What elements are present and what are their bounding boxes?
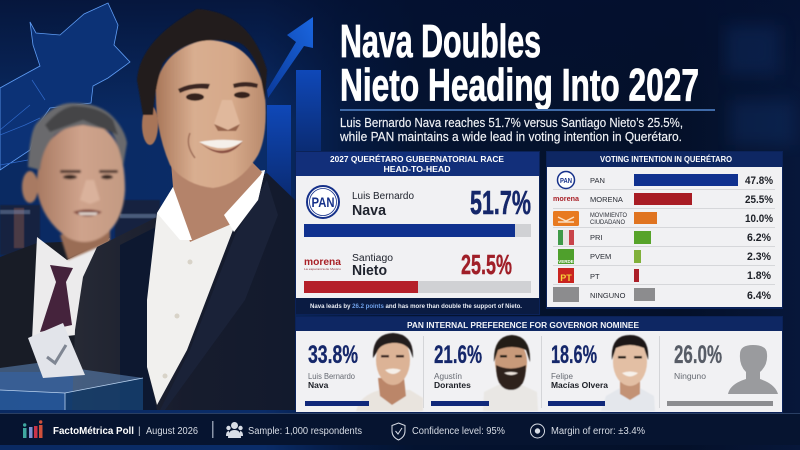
- pollster and date: August 2026: [146, 426, 198, 437]
- panel heading: VOTING INTENTION IN QUERÉTARO: [600, 155, 732, 164]
- title: Nava Doubles: [340, 15, 541, 67]
- pollster and date: [53, 425, 198, 437]
- row: PVEM: PVEM: [590, 252, 611, 261]
- pollster and date: FactoMétrica Poll: [53, 425, 134, 437]
- panel heading: 2027 QUERÉTARO GUBERNATORIAL RACE: [330, 155, 505, 164]
- morena logo: morena: [304, 256, 341, 268]
- candidate: Nava: [305, 333, 423, 411]
- row dividers: [553, 190, 775, 284]
- row: PAN: 47.8%: [745, 175, 773, 187]
- title: [340, 15, 699, 110]
- row: MORENA: MORENA: [590, 195, 623, 204]
- subtitle: Luis Bernardo Nava reaches 51.7% versus Santiago Nieto’s 25.5%,: [340, 116, 683, 130]
- option: Ninguno: Ninguno: [674, 372, 707, 381]
- map of Querétaro: [0, 3, 130, 170]
- icon: target: [530, 424, 544, 438]
- panel: PAN internal preference: [295, 316, 783, 413]
- sample: Sample: 1,000 respondents: [248, 426, 362, 437]
- row: PT: PT: [560, 273, 572, 283]
- panel: head-to-head: [295, 151, 540, 315]
- row: PAN: PAN: [590, 176, 605, 185]
- candidate: Dorantes: 21.6%: [434, 341, 482, 369]
- candidate: Dorantes: Agustín: [434, 372, 462, 381]
- row: NINGUNO: 6.4%: [747, 290, 771, 302]
- candidate: Macías Olvera: 18.6%: [551, 341, 597, 369]
- photo: Macías Olvera: [601, 335, 655, 411]
- row: PT: PT: [590, 272, 600, 281]
- title rule: [340, 109, 715, 111]
- silhouette: [728, 345, 778, 394]
- photo: Nava: [356, 333, 423, 411]
- confidence: Confidence level: 95%: [412, 426, 505, 437]
- candidate: Macías Olvera: Macías Olvera: [551, 380, 608, 390]
- ballot paper with check: [28, 323, 85, 378]
- lead note: Nava leads by 26.2 points and has more than double the support of Nieto.: [310, 303, 522, 310]
- rising bars and arrow: [267, 17, 321, 200]
- PAN logo: [307, 186, 339, 218]
- row: PVEM: [558, 249, 771, 264]
- footer divider: [212, 421, 214, 438]
- Nava name: Luis Bernardo: [352, 191, 414, 202]
- panel heading: PAN INTERNAL PREFERENCE FOR GOVERNOR NOMINEE: [407, 321, 640, 330]
- row: Movimiento Ciudadano: [553, 211, 773, 226]
- top vignette: [0, 0, 800, 300]
- row: PT: [558, 268, 771, 283]
- row: PT: 1.8%: [747, 270, 771, 282]
- row: MORENA: morena: [553, 196, 579, 203]
- PAN logo: PAN: [312, 194, 334, 210]
- city skyline: [0, 200, 160, 255]
- option: Ninguno: [667, 341, 778, 406]
- row: MORENA: 25.5%: [745, 194, 773, 206]
- row: MORENA: [553, 193, 773, 206]
- panel: voting intention: [546, 151, 783, 309]
- candidate: Macías Olvera: Felipe: [551, 372, 574, 381]
- icon: people: [226, 422, 243, 438]
- subtitle: while PAN maintains a wide lead in voting intention in Querétaro.: [339, 130, 682, 144]
- FactoMétrica logo: [23, 420, 42, 438]
- footer bar: [0, 413, 800, 445]
- row: PAN: PAN: [560, 178, 572, 185]
- Nava bar: [304, 224, 531, 237]
- row: Movimiento Ciudadano: MOVIMIENTO: [590, 213, 627, 219]
- row: PVEM: 2.3%: [747, 251, 771, 263]
- photo: Dorantes: [483, 335, 538, 411]
- Nava name: [352, 191, 414, 219]
- row: PVEM: VERDE: [558, 259, 574, 264]
- row: Movimiento Ciudadano: 10.0%: [745, 213, 773, 225]
- Nieto bar: [304, 281, 531, 293]
- Nieto name: Santiago: [352, 253, 393, 264]
- panel heading: [330, 155, 505, 174]
- row: PRI: 6.2%: [747, 232, 771, 244]
- candidate: Dorantes: [431, 335, 538, 411]
- panel heading: HEAD-TO-HEAD: [384, 165, 451, 174]
- row: PRI: PRI: [590, 233, 603, 242]
- portrait: Luis Bernardo Nava: [72, 9, 295, 410]
- candidate: Nava: 33.8%: [308, 341, 358, 369]
- Nava name: Nava: [352, 202, 387, 219]
- Nieto name: [352, 253, 393, 279]
- candidate: Macías Olvera: [548, 335, 655, 411]
- row: NINGUNO: NINGUNO: [590, 291, 626, 300]
- candidate: Nava: Nava: [308, 380, 329, 390]
- candidate: Dorantes: Dorantes: [434, 380, 471, 390]
- row: Movimiento Ciudadano: CIUDADANO: [590, 220, 625, 226]
- pollster and date: |: [138, 426, 141, 437]
- ballot box: [0, 323, 143, 410]
- row: NINGUNO: [553, 287, 771, 302]
- Nieto name: Nieto: [352, 262, 387, 279]
- option: Ninguno: 26.0%: [674, 341, 722, 369]
- Nieto percentage: 25.5%: [461, 249, 512, 280]
- row: PRI: [558, 230, 771, 245]
- row: PAN: [558, 172, 773, 188]
- margin of error: Margin of error: ±3.4%: [551, 426, 645, 437]
- morena logo: La esperanza de México: [304, 267, 341, 271]
- icon: shield: [392, 423, 405, 440]
- subtitle: [339, 116, 683, 144]
- portrait: Santiago Nieto: [0, 103, 127, 372]
- faint chart right side: [725, 25, 795, 145]
- Nava percentage: 51.7%: [470, 184, 531, 221]
- candidate: Nava: Luis Bernardo: [308, 372, 356, 381]
- card dividers: [424, 336, 660, 408]
